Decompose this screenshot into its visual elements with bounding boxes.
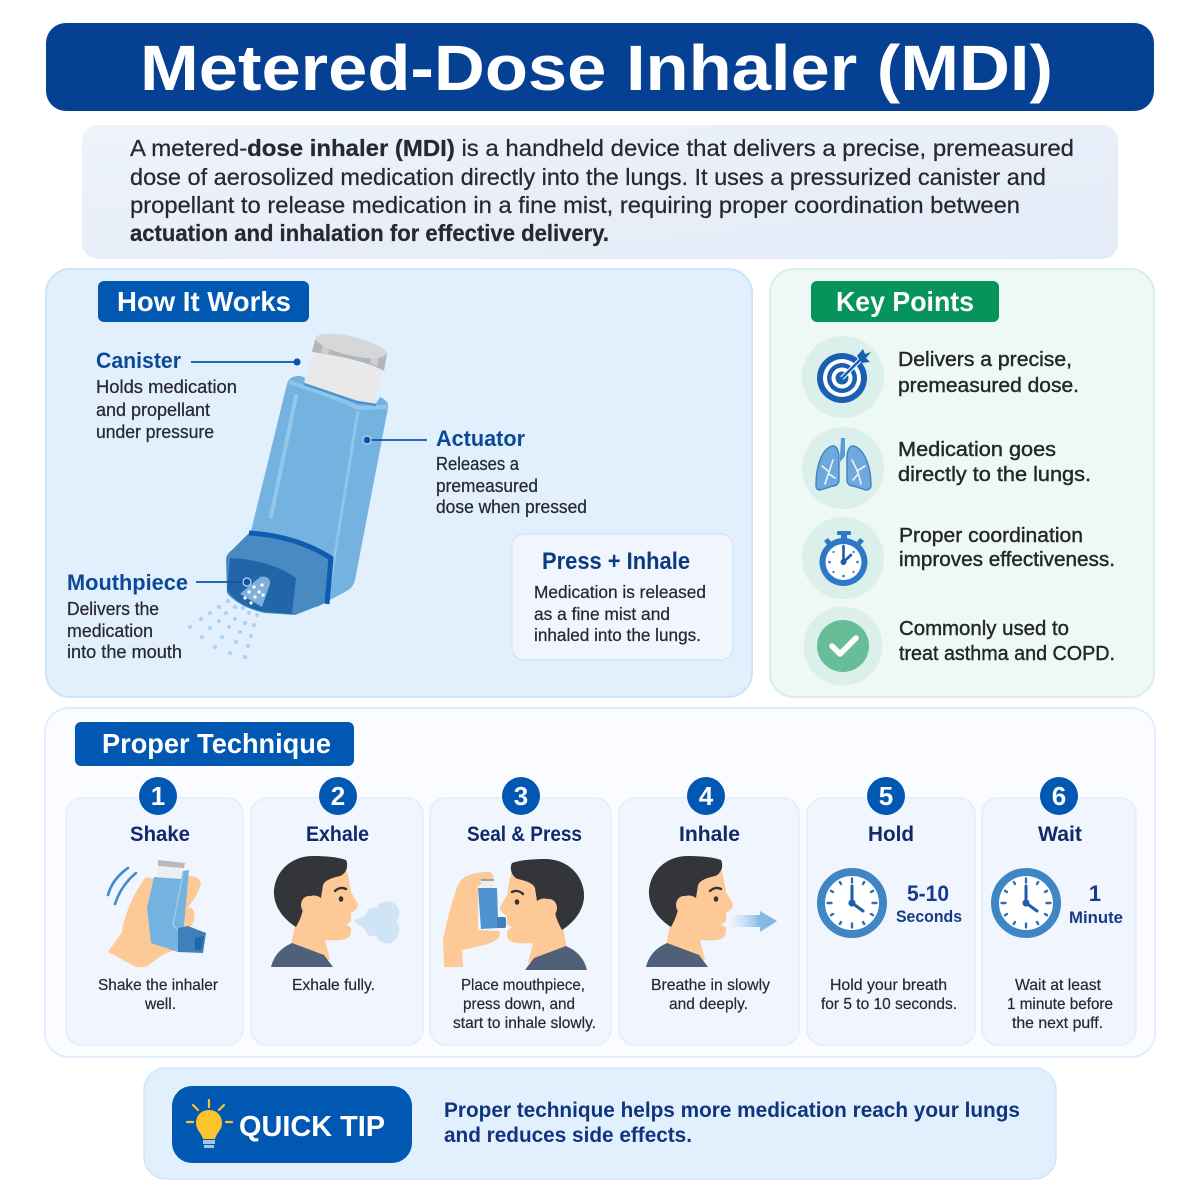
step 3: seal and press	[430, 777, 611, 1045]
step 4: inhale	[619, 777, 799, 1045]
panel: proper technique	[45, 708, 1155, 1057]
quick tip text	[444, 1099, 1020, 1147]
icon: person sealing lips on inhaler	[443, 859, 587, 970]
label: actuator: dose when pressed	[436, 497, 587, 517]
step 5: hold: 5-10	[907, 881, 949, 906]
step 1: shake: Shake	[130, 823, 190, 846]
step 5: hold: Hold	[868, 823, 914, 846]
key point: check mark: treat asthma and COPD.	[899, 642, 1115, 665]
step 3: seal and press: start to inhale slowly.	[453, 1015, 596, 1032]
label: mouthpiece: medication	[67, 621, 153, 641]
panel: quick tip	[144, 1068, 1056, 1179]
label: canister: Holds medication	[96, 377, 237, 397]
heading: key points: Key Points	[836, 286, 974, 317]
icon: clock	[821, 872, 883, 934]
step 3: seal and press: Seal & Press	[467, 823, 582, 846]
panel: how it works	[46, 269, 752, 697]
step 2: exhale: Exhale fully.	[292, 977, 375, 994]
icon: person inhaling	[646, 856, 777, 967]
label: mouthpiece: Delivers the	[67, 599, 159, 619]
callout: press + inhale: Press + Inhale	[542, 548, 690, 575]
key point: lungs	[802, 427, 1091, 509]
label: canister: under pressure	[96, 422, 214, 442]
heading: how it works	[98, 281, 309, 322]
label: actuator	[363, 426, 587, 517]
step 6: wait: 1 minute before	[1007, 996, 1113, 1013]
label: mouthpiece: into the mouth	[67, 642, 182, 662]
step 5: hold	[807, 777, 975, 1045]
step 5: hold: Hold your breath	[830, 977, 947, 994]
panel: key points	[770, 269, 1154, 697]
label: canister: and propellant	[96, 400, 210, 420]
step 1: shake: 1	[151, 781, 165, 811]
step 3: seal and press: 3	[514, 781, 528, 811]
step 4: inhale: Inhale	[679, 823, 740, 846]
key point: check mark: Commonly used to	[899, 617, 1069, 640]
heading: key points	[811, 281, 999, 322]
step 3: seal and press: press down, and	[463, 996, 575, 1013]
step 4: inhale: and deeply.	[669, 996, 748, 1013]
callout: press + inhale: Medication is released	[534, 582, 706, 602]
intro text block: dose of aerosolized medication directly into the lungs. It uses a pressurized canister and	[130, 164, 1046, 190]
heading: proper technique: Proper Technique	[102, 728, 331, 759]
key point: precise dose: premeasured dose.	[898, 374, 1079, 397]
label: actuator: premeasured	[436, 476, 538, 496]
intro text block: A metered-dose inhaler (MDI) is a handheld device that delivers a precise, premeasured	[130, 135, 1074, 161]
quick tip text: and reduces side effects.	[444, 1124, 692, 1147]
callout: press + inhale: as a fine mist and	[534, 604, 670, 624]
icon: light bulb	[187, 1100, 232, 1148]
step 4: inhale: Breathe in slowly	[651, 977, 770, 994]
step 4: inhale: 4	[699, 781, 714, 811]
quick tip text: Proper technique helps more medication reach your lungs	[444, 1099, 1020, 1122]
step 2: exhale	[251, 777, 423, 1045]
step 6: wait: the next puff.	[1012, 1015, 1103, 1032]
key point: precise dose	[802, 336, 1079, 418]
label: canister	[96, 348, 301, 442]
label: mouthpiece: Mouthpiece	[67, 570, 188, 595]
step 6: wait	[982, 777, 1136, 1045]
key point: check mark	[804, 606, 1115, 686]
title banner: Metered-Dose Inhaler (MDI)	[140, 32, 1053, 104]
label: actuator: Releases a	[436, 454, 520, 474]
step 2: exhale: Exhale	[306, 823, 369, 846]
step 2: exhale: 2	[331, 781, 345, 811]
icon: person exhaling	[271, 856, 400, 967]
step 6: wait: 6	[1052, 781, 1066, 811]
key point: lungs: directly to the lungs.	[898, 463, 1091, 486]
key point: stopwatch	[802, 517, 1115, 599]
key point: precise dose: Delivers a precise,	[898, 348, 1072, 371]
heading: how it works: How It Works	[117, 286, 291, 317]
step 1: shake: well.	[144, 996, 176, 1013]
intro text block	[82, 125, 1118, 259]
heading: proper technique	[75, 722, 354, 766]
step 6: wait: 1	[1089, 881, 1101, 906]
key point: stopwatch: improves effectiveness.	[899, 548, 1115, 571]
intro text block: actuation and inhalation for effective delivery.	[130, 220, 609, 246]
icon: clock	[995, 872, 1057, 934]
step 3: seal and press: Place mouthpiece,	[461, 977, 585, 994]
label: actuator: Actuator	[436, 426, 525, 451]
step 6: wait: Minute	[1069, 908, 1123, 927]
label: mouthpiece	[67, 570, 251, 662]
illustration: spray mist	[188, 599, 259, 659]
icon: hand shaking inhaler	[108, 860, 206, 967]
quick tip badge: QUICK TIP	[239, 1111, 385, 1143]
key point: lungs: Medication goes	[898, 438, 1056, 461]
callout: press + inhale	[512, 534, 733, 660]
step 6: wait: Wait at least	[1015, 977, 1102, 994]
intro text block: propellant to release medication in a fine mist, requiring proper coordination between	[130, 192, 1020, 218]
key point: stopwatch: Proper coordination	[899, 524, 1083, 547]
step 5: hold: 5	[879, 781, 893, 811]
step 1: shake: Shake the inhaler	[98, 977, 219, 994]
step 5: hold: Seconds	[896, 907, 962, 926]
title banner	[46, 23, 1154, 111]
label: canister: Canister	[96, 348, 181, 373]
step 6: wait: Wait	[1038, 823, 1082, 846]
quick tip badge	[172, 1086, 412, 1163]
illustration: inhaler	[226, 329, 388, 615]
step 1: shake	[66, 777, 243, 1045]
step 5: hold: for 5 to 10 seconds.	[821, 996, 957, 1013]
callout: press + inhale: inhaled into the lungs.	[534, 625, 701, 645]
